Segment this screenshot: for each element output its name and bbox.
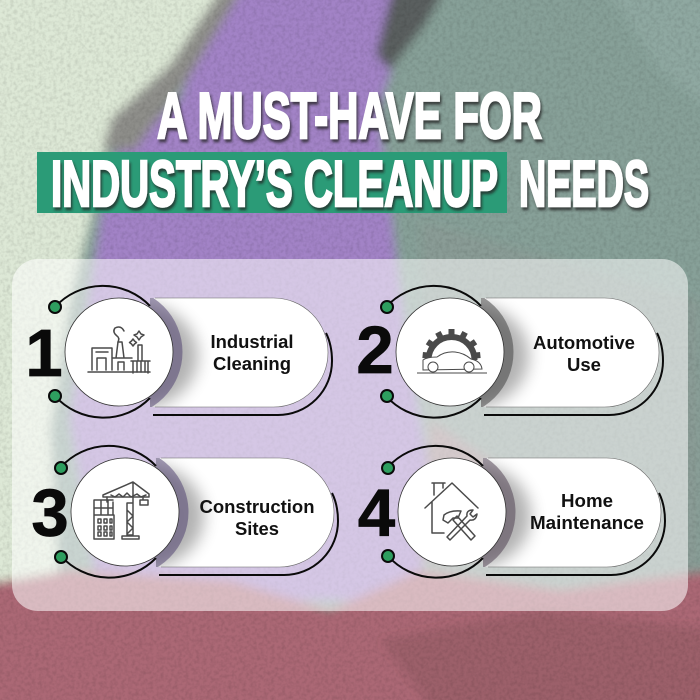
pill edge (486, 298, 659, 407)
circle crescent (481, 298, 514, 407)
connector arcs (386, 286, 481, 418)
label: Industrial (210, 332, 294, 352)
pill shadow (156, 458, 212, 567)
pill edge (155, 298, 328, 407)
pill shadow (481, 298, 538, 407)
label: Sites (235, 519, 279, 539)
pill outline arc (486, 493, 665, 575)
icon: factory and broom (88, 327, 150, 373)
number 2: 2 (356, 313, 394, 388)
pill edge (488, 458, 661, 567)
icon: gear and car (417, 329, 487, 373)
number 4: 4 (358, 476, 395, 551)
circle (65, 298, 173, 406)
icon: crane and building (94, 482, 149, 539)
pill shadow (483, 458, 540, 567)
circle (396, 298, 504, 406)
label: Home (561, 491, 613, 511)
label: Automotive (533, 333, 635, 353)
dots (381, 301, 393, 402)
label: Use (567, 355, 601, 375)
dots (382, 462, 394, 562)
connector arcs (61, 446, 156, 578)
circle (398, 458, 506, 566)
title highlight bar (37, 152, 507, 213)
card 1: industrial cleaning (25, 286, 332, 418)
circle crescent (483, 458, 516, 567)
pill (483, 458, 661, 567)
connector arcs (388, 446, 483, 578)
card 2: automotive use (356, 286, 663, 418)
pill (156, 458, 334, 567)
pill outline arc (484, 333, 663, 415)
label: Maintenance (530, 513, 644, 533)
pill edge (161, 458, 334, 567)
pill shadow (150, 298, 206, 407)
pill (150, 298, 328, 407)
card 3: construction sites (31, 446, 338, 578)
dots (49, 301, 61, 402)
pill outline arc (153, 333, 332, 415)
circle crescent (150, 298, 182, 407)
pill outline arc (159, 493, 338, 575)
pill (481, 298, 659, 407)
number 3: 3 (31, 476, 69, 551)
circle crescent (156, 458, 188, 567)
connector arcs (55, 286, 150, 418)
card 4: home maintenance (358, 446, 665, 578)
dots (55, 462, 67, 563)
circle (71, 458, 179, 566)
icon: house with hammer and wrench (425, 483, 478, 540)
number 1: 1 (25, 316, 63, 391)
translucent panel (12, 259, 688, 611)
label: Cleaning (213, 354, 291, 374)
label: Construction (200, 497, 314, 517)
